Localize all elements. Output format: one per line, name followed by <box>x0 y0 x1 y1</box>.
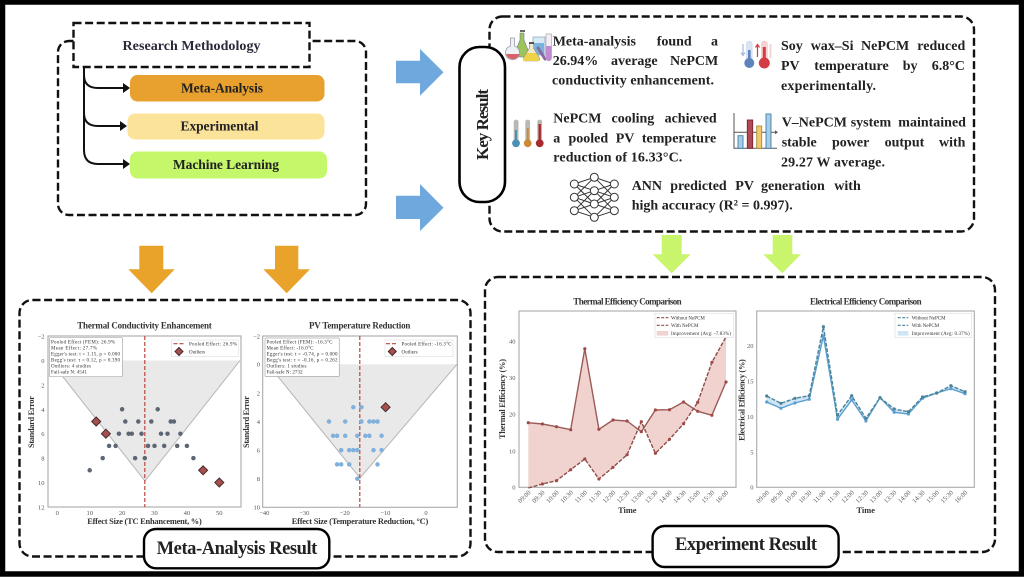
legend: Pooled Effect: -16.3°C <box>402 342 452 348</box>
y ticks <box>253 334 261 512</box>
legend: Outliers <box>189 350 205 356</box>
text: meta-analysis finding: Meta-analysis <box>553 34 636 50</box>
step: meta-analysis: Meta-Analysis <box>181 80 263 96</box>
text: pooled temperature reduction: achieved <box>665 111 717 126</box>
connector arrows <box>84 67 130 169</box>
statistics box <box>265 338 339 376</box>
funnel region <box>50 360 240 481</box>
legend <box>895 313 972 338</box>
text: V-NePCM power output: 29.27 W average. <box>781 156 885 171</box>
text: V-NePCM power output: with <box>939 136 966 151</box>
time ticks: 11:00 <box>812 489 828 505</box>
text: ANN prediction: predicted <box>670 179 727 194</box>
time ticks: 09:00 <box>755 489 771 505</box>
label: key result <box>460 47 505 202</box>
label: meta-analysis result <box>144 529 329 568</box>
statistics box: Fail-safe N: 4541 <box>51 370 88 376</box>
text: soy wax finding: reduced <box>917 39 965 54</box>
legend <box>655 313 733 338</box>
y ticks: 2 <box>257 390 260 398</box>
y ticks: 10 <box>509 448 516 456</box>
y ticks: 5 <box>750 450 754 456</box>
y ticks: 0 <box>512 484 516 492</box>
x ticks: 10 <box>86 510 93 517</box>
label: experiment result: Experiment Result <box>675 535 818 555</box>
y ticks: 10 <box>747 414 754 421</box>
y axis label: Electrical Efficiency (%) <box>738 359 746 441</box>
time ticks: 15:00 <box>686 489 702 505</box>
y ticks: 6 <box>257 448 261 454</box>
statistics box: Pooled Effect (FEM): 26.9% <box>51 340 115 346</box>
time ticks: 13:30 <box>883 489 898 505</box>
text: pooled temperature reduction: cooling <box>612 111 654 126</box>
chart title: Electrical Efficiency Comparison <box>810 296 922 306</box>
legend: Without NePCM <box>912 316 946 322</box>
y axis label: Thermal Efficiency (%) <box>498 359 507 439</box>
time ticks: 09:00 <box>517 489 532 505</box>
panel: experiment result <box>485 277 995 567</box>
time ticks: 13:00 <box>869 489 884 505</box>
time ticks: 12:30 <box>616 489 631 505</box>
y ticks: 2 <box>41 382 44 390</box>
text: pooled temperature reduction: reduction of 16.33°C. <box>553 151 682 166</box>
legend <box>172 340 238 357</box>
text: V-NePCM power output: V–NePCM <box>782 116 847 131</box>
outlier <box>381 403 390 412</box>
arrow: orange left <box>128 246 175 293</box>
text: soy wax finding: Soy <box>781 39 803 54</box>
statistics box <box>50 338 122 377</box>
y ticks: 40 <box>509 338 516 346</box>
time ticks <box>755 489 969 505</box>
icon: bar chart <box>734 113 778 148</box>
y axis label: Standard Error <box>27 396 36 448</box>
text: soy wax finding: NePCM <box>861 39 909 54</box>
time ticks: 13:30 <box>644 489 660 505</box>
text: meta-analysis finding: average <box>611 54 658 69</box>
text: ANN prediction: ANN <box>632 179 662 194</box>
label: key result: Key Result <box>473 89 492 160</box>
improvement fill <box>528 337 726 488</box>
statistics box: Begg's test: τ = -0.16, p = 0.262 <box>266 358 338 364</box>
y ticks: 0 <box>257 362 260 368</box>
time ticks: 10:00 <box>784 489 799 505</box>
text: V-NePCM power output: output <box>885 136 925 151</box>
outliers <box>92 417 224 487</box>
step: experimental: Experimental <box>180 118 259 134</box>
text: ANN prediction: high accuracy (R² = 0.997). <box>632 198 793 213</box>
icon: thermometers <box>512 120 544 147</box>
text: V-NePCM power output: maintained <box>898 116 966 131</box>
icon: lab flasks <box>505 31 552 61</box>
legend: Outliers <box>402 350 418 356</box>
time ticks: 12:30 <box>855 489 870 505</box>
line chart: electrical efficiency <box>738 296 974 515</box>
text: soy wax finding: PV <box>781 59 800 74</box>
text: soy wax finding: temperature <box>814 59 889 74</box>
text: soy wax finding: wax–Si <box>811 39 854 54</box>
panel: key result <box>460 16 974 232</box>
statistics box: Mean Effect: -16.0°C <box>266 346 314 352</box>
y ticks: −2 <box>253 334 260 340</box>
text: meta-analysis finding: a <box>711 34 718 50</box>
legend: Improvement (Avg: 0.37%) <box>912 332 970 337</box>
step: machine learning: Machine Learning <box>173 157 279 172</box>
text: pooled temperature reduction: temperature <box>642 131 716 146</box>
y ticks: 0 <box>41 358 44 365</box>
x ticks: 0 <box>56 510 59 517</box>
time ticks: 16:00 <box>715 489 730 505</box>
time ticks: 10:30 <box>559 489 575 505</box>
y ticks <box>38 334 45 512</box>
funnel plot: PV temperature <box>242 320 457 526</box>
text: meta-analysis finding: NePCM <box>670 54 718 69</box>
statistics box: Fail-safe N: 2732 <box>266 370 303 376</box>
time ticks: 14:30 <box>911 489 927 505</box>
time ticks: 15:30 <box>701 489 716 505</box>
x axis label: Effect Size (TC Enhancement, %) <box>87 517 202 526</box>
text: meta-analysis finding: conductivity enhancement. <box>552 74 714 88</box>
legend: Pooled Effect: 26.9% <box>189 342 237 348</box>
label: experiment result <box>653 526 839 567</box>
y ticks: 15 <box>747 378 754 386</box>
y ticks: 12 <box>38 504 44 512</box>
icon: neural network <box>570 173 618 221</box>
funnel region <box>268 364 457 478</box>
time ticks: 14:30 <box>672 489 688 505</box>
text: soy wax finding: by <box>903 59 917 74</box>
text: ANN prediction: with <box>834 179 861 194</box>
arrow: green left <box>653 235 691 273</box>
step: machine learning <box>130 152 327 178</box>
arrow: blue top <box>396 49 444 96</box>
time ticks: 09:30 <box>770 489 785 505</box>
y ticks: 10 <box>38 480 44 487</box>
arrow: orange right <box>263 246 310 293</box>
text: ANN prediction: generation <box>761 179 825 194</box>
y ticks <box>509 338 516 492</box>
statistics box: Egger's test: t = -0.74, p = 0.000 <box>266 352 338 358</box>
text: soy wax finding: 6.8°C <box>932 59 965 74</box>
x ticks <box>56 510 223 517</box>
chart title: Thermal Efficiency Comparison <box>573 296 682 306</box>
arrow: blue bottom <box>396 184 444 231</box>
time ticks: 12:00 <box>840 489 856 505</box>
time ticks: 15:00 <box>925 489 941 505</box>
chart title: Thermal Conductivity Enhancement <box>77 320 212 330</box>
y ticks: 0 <box>750 484 754 492</box>
pooled effect line <box>359 336 361 507</box>
statistics box: Pooled Effect (FEM): -16.3°C <box>266 340 333 346</box>
y ticks: 4 <box>41 407 45 414</box>
text: ANN prediction: PV <box>735 179 754 194</box>
text: soy wax finding: experimentally. <box>781 79 876 94</box>
statistics box: Mean Effect: 27.7% <box>51 346 97 352</box>
text: pooled temperature reduction: NePCM <box>553 111 602 126</box>
legend <box>385 340 453 357</box>
line chart: thermal efficiency <box>498 296 736 515</box>
y axis label: Standard Error <box>242 396 251 448</box>
y ticks: 20 <box>747 343 754 350</box>
x axis label: Time <box>618 506 637 515</box>
time ticks: 13:00 <box>630 489 645 505</box>
y ticks: 6 <box>41 431 45 438</box>
x ticks: 50 <box>216 510 223 517</box>
time ticks: 10:00 <box>545 489 561 505</box>
time ticks <box>517 489 730 505</box>
funnel plot: thermal conductivity <box>27 320 241 526</box>
series: without NePCM <box>528 349 726 432</box>
panel: research methodology <box>58 23 366 215</box>
y ticks: 8 <box>41 456 44 462</box>
statistics box: Outliers: 1 studies <box>266 364 307 370</box>
series: with NePCM <box>767 327 965 418</box>
heading: research methodology: Research Methodology <box>122 39 260 54</box>
text: V-NePCM power output: power <box>832 136 869 151</box>
panel: meta-analysis result <box>20 300 470 568</box>
legend: With NePCM <box>671 324 699 329</box>
x ticks: 30 <box>151 510 158 517</box>
time ticks: 16:00 <box>954 489 969 505</box>
time ticks: 14:00 <box>658 489 674 505</box>
legend: With NePCM <box>912 324 940 329</box>
x axis label: Time <box>856 506 875 515</box>
time ticks: 09:30 <box>531 489 547 505</box>
time ticks: 15:30 <box>940 489 955 505</box>
y ticks: −2 <box>38 334 44 340</box>
text: pooled temperature reduction: PV <box>616 131 634 146</box>
heading: research methodology <box>74 23 310 67</box>
series: with NePCM <box>528 337 726 488</box>
x ticks: 20 <box>119 510 125 517</box>
x ticks: 40 <box>184 510 190 517</box>
y ticks: 10 <box>254 504 260 512</box>
text: V-NePCM power output: stable <box>782 136 817 151</box>
time ticks: 10:30 <box>798 489 813 505</box>
statistics box: Outliers: 4 studies <box>51 364 91 370</box>
arrow: green right <box>763 235 801 273</box>
x ticks: 0 <box>424 510 428 517</box>
y ticks: 4 <box>257 419 261 426</box>
time ticks: 14:00 <box>897 489 913 505</box>
improvement fill <box>767 327 965 421</box>
step: meta-analysis <box>130 75 324 102</box>
time ticks: 12:00 <box>602 489 617 505</box>
y ticks: 30 <box>509 375 516 382</box>
time ticks: 11:30 <box>826 489 842 505</box>
study points <box>90 409 193 470</box>
x axis label: Effect Size (Temperature Reduction, °C) <box>292 517 428 526</box>
time ticks: 11:00 <box>574 489 589 505</box>
legend: Improvement (Avg: -7.83%) <box>671 332 731 337</box>
y ticks: 20 <box>509 412 516 418</box>
text: V-NePCM power output: system <box>851 116 891 131</box>
legend: Without NePCM <box>671 316 705 322</box>
text: pooled temperature reduction: pooled <box>568 131 608 146</box>
x ticks: −40 <box>259 510 269 517</box>
statistics box: Begg's test: τ = 0.12, p = 0.390 <box>51 358 120 364</box>
y ticks <box>747 343 754 492</box>
step: experimental <box>128 114 324 140</box>
x ticks: −20 <box>340 510 350 517</box>
text: meta-analysis finding: 26.94% <box>553 54 598 69</box>
y ticks: 8 <box>257 476 260 483</box>
text: meta-analysis finding: found <box>657 34 692 50</box>
study points <box>329 407 382 479</box>
x ticks <box>259 510 428 517</box>
pooled effect line <box>144 336 146 507</box>
label: meta-analysis result: Meta-Analysis Result <box>157 539 318 559</box>
statistics box: Egger's test: t = 1.15, p = 0.000 <box>51 352 120 358</box>
series: without NePCM <box>767 336 965 421</box>
chart title: PV Temperature Reduction <box>309 320 410 330</box>
x ticks: −10 <box>380 510 390 517</box>
icon: hot and cold thermometers <box>741 41 772 68</box>
x ticks: −30 <box>299 510 309 517</box>
text: pooled temperature reduction: a <box>553 131 560 146</box>
time ticks: 11:30 <box>588 489 603 505</box>
